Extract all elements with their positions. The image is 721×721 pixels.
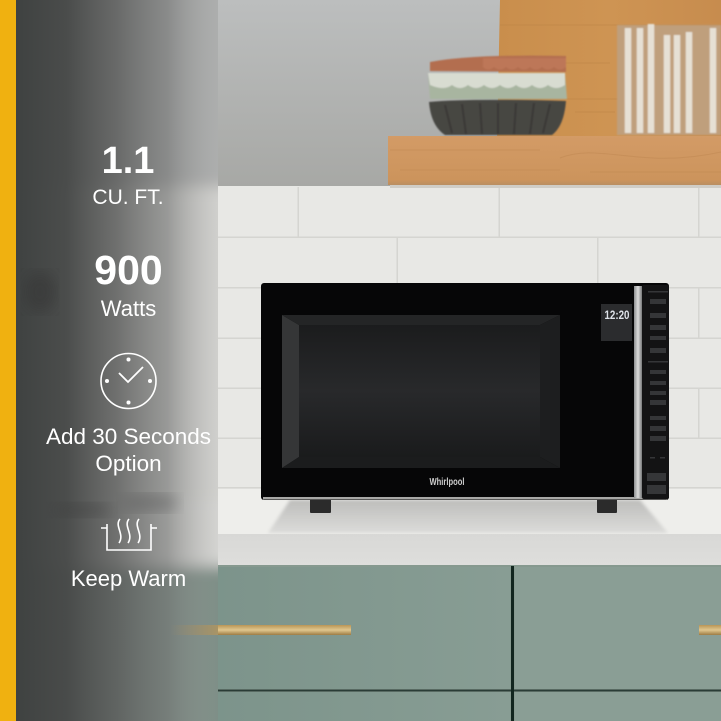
clock text: 12:20 bbox=[604, 308, 630, 322]
display bbox=[601, 304, 632, 341]
chrome handle bbox=[634, 286, 642, 498]
blurred scene bbox=[124, 0, 218, 721]
counter top surface bbox=[0, 489, 721, 534]
cabinets bbox=[0, 565, 721, 721]
feet bbox=[310, 498, 331, 513]
feature: add 30 seconds bbox=[46, 424, 211, 476]
dark smudge bbox=[30, 278, 53, 306]
shelf shadow bbox=[390, 185, 721, 188]
left cabinet door bbox=[0, 567, 510, 689]
wood backing panel bbox=[497, 0, 721, 140]
dark bowl bbox=[429, 100, 566, 135]
lower right drawer bbox=[515, 692, 721, 721]
feature: keep warm: Keep Warm bbox=[71, 566, 186, 591]
microwave bbox=[261, 283, 669, 513]
smudge near pot right bbox=[122, 494, 178, 512]
icon: clock bbox=[101, 354, 156, 408]
stacked bowls bbox=[428, 56, 567, 135]
white and sage bowl bbox=[428, 73, 567, 99]
tile backsplash bbox=[0, 186, 721, 506]
faded handle bbox=[180, 625, 218, 635]
left gradient panel bbox=[16, 0, 218, 721]
wall bbox=[0, 0, 721, 187]
bottom trim bbox=[263, 497, 667, 500]
feature: add 30 seconds: Add 30 Seconds bbox=[46, 424, 211, 449]
lower left drawer bbox=[0, 692, 510, 721]
stat: capacity bbox=[92, 140, 164, 209]
stat: capacity: 1.1 bbox=[102, 140, 154, 182]
icon: steaming pot bbox=[101, 519, 157, 550]
wooden shelf bbox=[388, 136, 721, 185]
glass jars bbox=[617, 24, 721, 135]
cabinet gap lines bbox=[218, 690, 721, 692]
yellow accent bar bbox=[0, 0, 16, 721]
counter reflection bbox=[268, 500, 668, 533]
smudge near pot left bbox=[84, 506, 104, 514]
control panel bbox=[642, 285, 669, 499]
counter front edge bbox=[0, 534, 721, 566]
control panel labels bbox=[647, 291, 668, 494]
brass handle right bbox=[699, 625, 721, 635]
right cabinet door bbox=[515, 567, 721, 689]
brass handle left bbox=[218, 625, 351, 635]
stat: wattage: Watts bbox=[101, 296, 156, 321]
body bbox=[261, 283, 669, 500]
brand logo: Whirlpool bbox=[430, 477, 465, 488]
stat: wattage bbox=[94, 247, 163, 321]
terracotta bowl bbox=[430, 56, 566, 72]
feature: add 30 seconds: Option bbox=[95, 451, 162, 476]
door window bbox=[282, 315, 560, 468]
stat: wattage: 900 bbox=[94, 247, 163, 293]
stat: capacity: CU. FT. bbox=[92, 186, 164, 209]
